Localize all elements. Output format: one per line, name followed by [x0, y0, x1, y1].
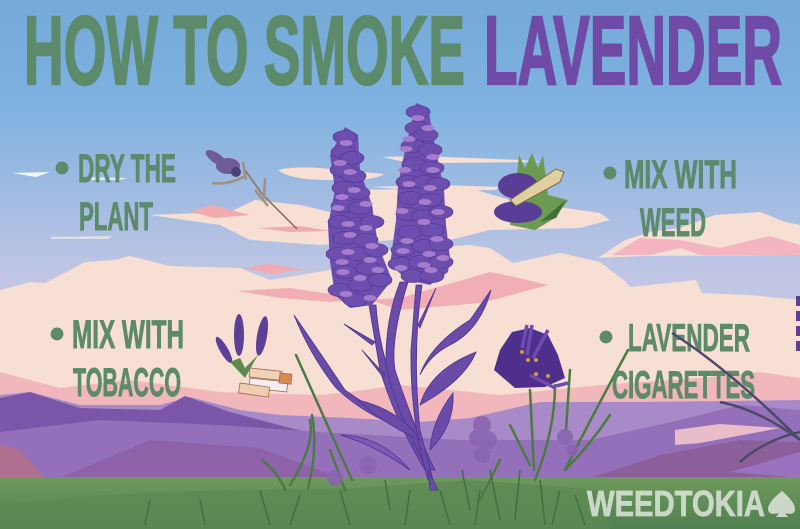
label: dry the plant [56, 147, 176, 239]
label: dry the plant: DRY THE [78, 147, 176, 191]
right flower spike [388, 103, 453, 285]
left flower spike [326, 127, 392, 308]
icon: lavender cigarettes pile [494, 325, 568, 388]
small background lavender [327, 416, 578, 486]
icon: dried lavender sprig [203, 147, 297, 229]
icon: lavender and weed bundle [494, 153, 568, 230]
label: mix with tobacco: TOBACCO [73, 361, 181, 405]
label: dry the plant: PLANT [79, 195, 153, 239]
label: mix with weed [604, 153, 737, 245]
big lavender plant [294, 103, 491, 490]
mountains [0, 372, 800, 480]
label: mix with weed: WEED [640, 201, 706, 245]
grass ground [0, 350, 800, 529]
corner plant at right edge [672, 296, 800, 462]
label: lavender cigarettes [600, 317, 755, 407]
stems and leaves [294, 282, 491, 490]
icon: lavender and cigarettes [213, 314, 292, 397]
label: mix with tobacco: MIX WITH [72, 313, 184, 357]
label: mix with tobacco [51, 313, 184, 405]
watermark logo: WEEDTOKIA [587, 483, 765, 524]
clouds [0, 156, 800, 420]
